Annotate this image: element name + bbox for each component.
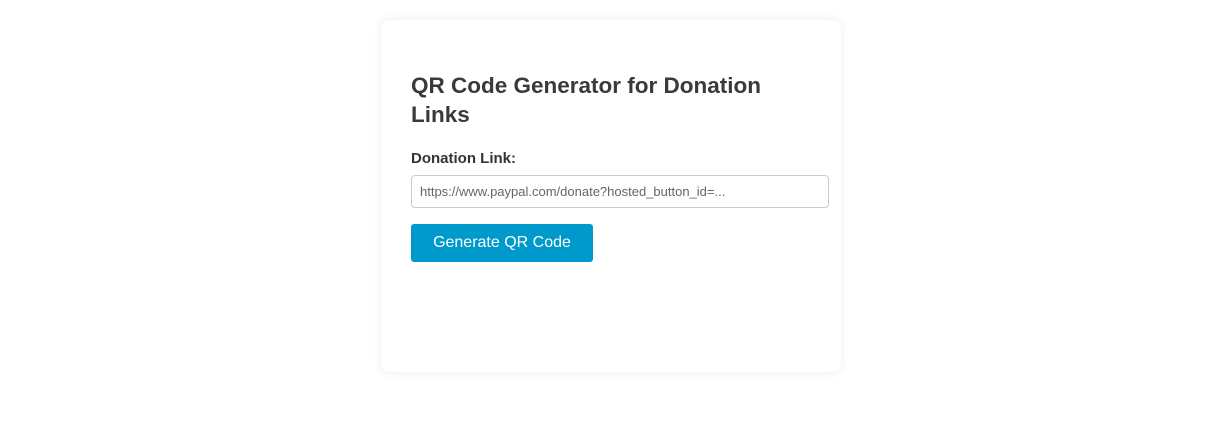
button: generate: Generate QR Code [433,234,571,251]
input field: https://www.paypal.com/donate?hosted_button_id=... [420,184,725,199]
title: QR Code Generator for Donation Links [411,73,761,127]
button: generate [411,224,593,262]
label: donation link: Donation Link: [411,150,516,167]
panel: card [381,20,841,372]
input field [411,175,829,208]
